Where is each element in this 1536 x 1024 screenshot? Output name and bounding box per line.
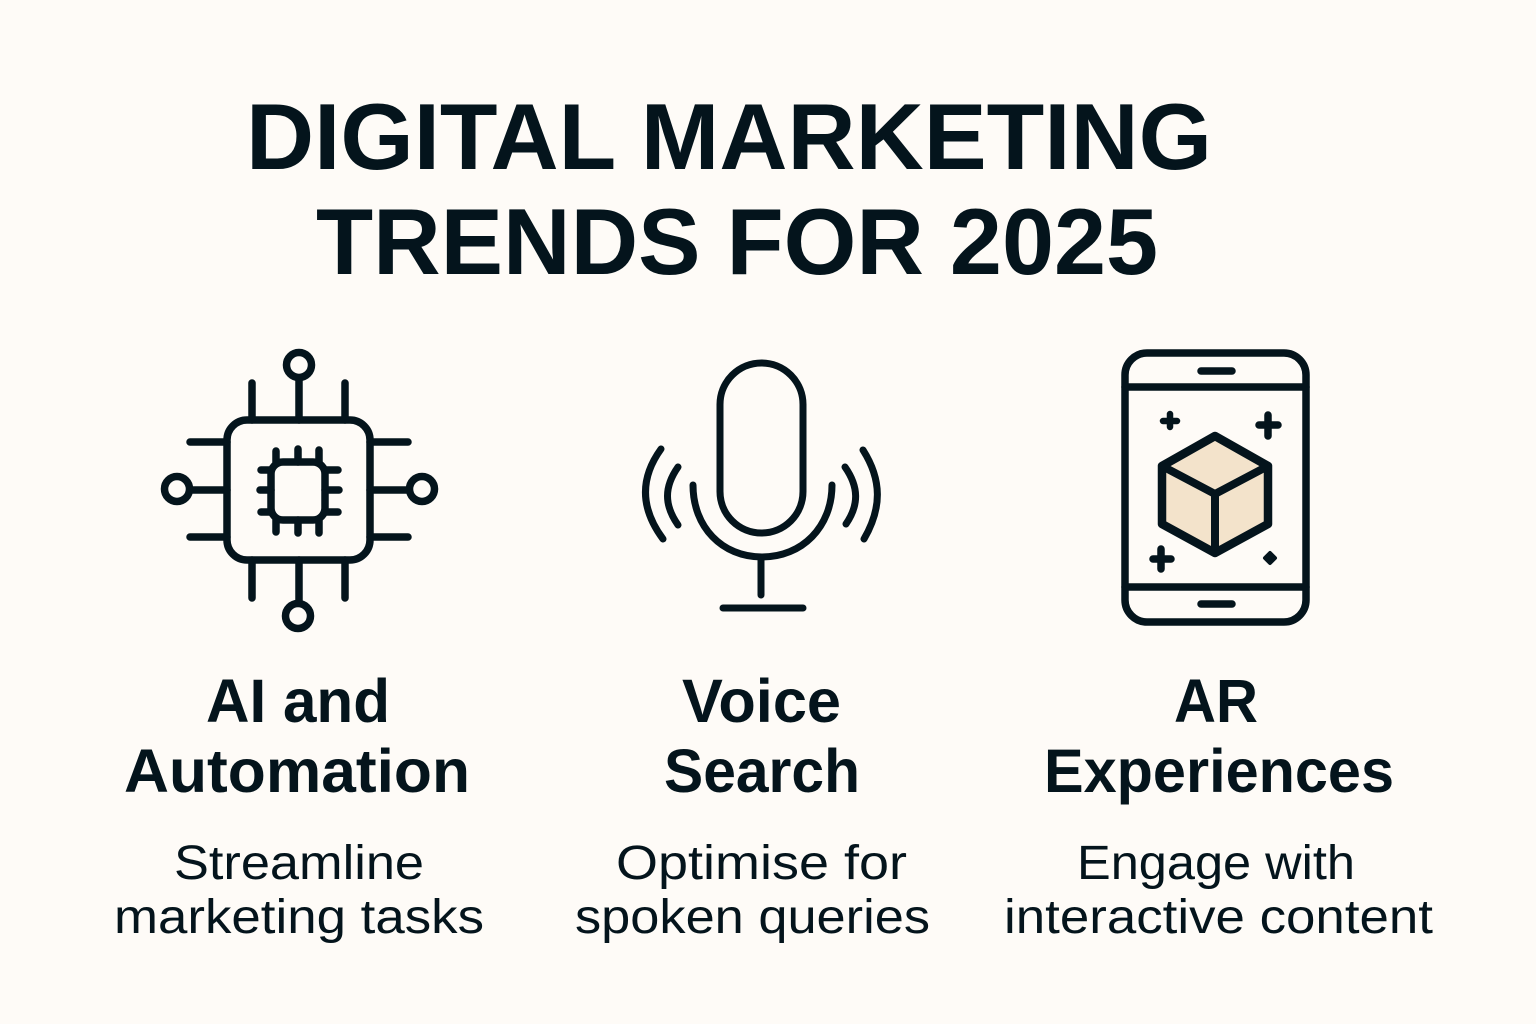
title: DIGITAL MARKETING: [246, 84, 1212, 189]
description: optimise for spoken queries: Optimise for: [616, 837, 907, 890]
icon: microphone with sound waves: [645, 363, 877, 608]
description: optimise for spoken queries: [575, 837, 930, 944]
heading: AR Experiences: Experiences: [1044, 737, 1394, 805]
description: streamline marketing tasks: marketing tasks: [114, 891, 484, 944]
description: engage with interactive content: Engage with: [1077, 837, 1355, 890]
description: streamline marketing tasks: Streamline: [174, 837, 424, 890]
heading: AR Experiences: AR: [1174, 667, 1258, 735]
panel: AI and Automation: [114, 352, 484, 944]
title: [246, 84, 1212, 294]
heading: AR Experiences: [1044, 667, 1394, 805]
description: streamline marketing tasks: [114, 837, 484, 944]
heading: Voice Search: [664, 667, 860, 805]
panel: AR Experiences: [1004, 353, 1433, 944]
icon: phone with AR cube: [1125, 353, 1306, 622]
panel: Voice Search: [575, 363, 930, 944]
icon: circuit chip: [164, 352, 434, 628]
heading: AI and Automation: AI and: [206, 667, 390, 735]
title: TRENDS FOR 2025: [316, 189, 1158, 294]
heading: Voice Search: Voice: [682, 667, 841, 735]
heading: AI and Automation: Automation: [124, 737, 470, 805]
heading: AI and Automation: [124, 667, 470, 805]
heading: Voice Search: Search: [664, 737, 860, 805]
description: engage with interactive content: [1004, 837, 1433, 944]
description: optimise for spoken queries: spoken queries: [575, 891, 930, 944]
description: engage with interactive content: interactive content: [1004, 891, 1433, 944]
